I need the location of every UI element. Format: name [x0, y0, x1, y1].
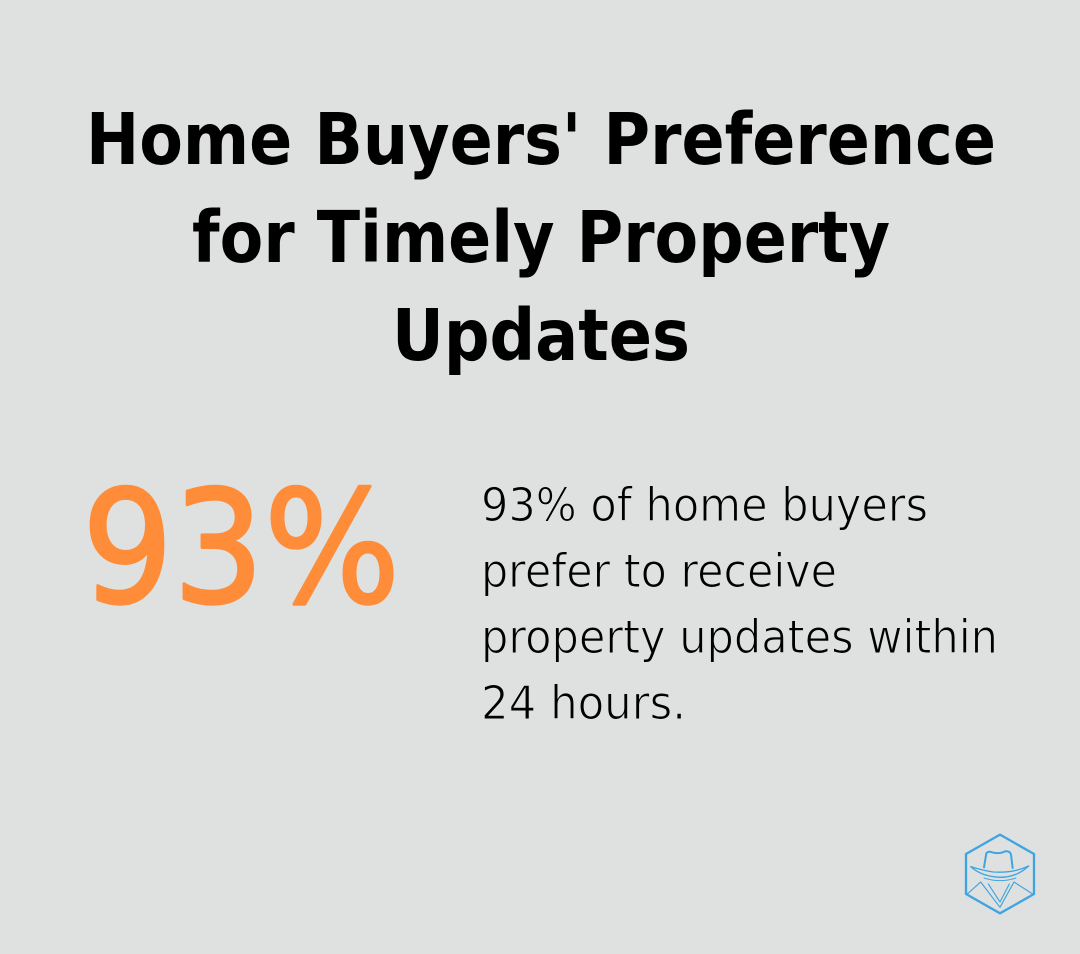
- title: [86, 98, 996, 377]
- statistic description: 93% of home buyers: [481, 478, 928, 532]
- statistic description: prefer to receive: [481, 544, 837, 598]
- statistic description: [481, 478, 998, 730]
- title: Home Buyers' Preference: [86, 98, 996, 181]
- big statistic: 93%: 93%: [82, 457, 400, 639]
- statistic description: property updates within: [481, 610, 998, 664]
- statistic description: 24 hours.: [481, 676, 686, 730]
- title: Updates: [392, 294, 690, 377]
- icon: hexagon spy logo: [966, 835, 1034, 913]
- title: for Timely Property: [192, 196, 890, 279]
